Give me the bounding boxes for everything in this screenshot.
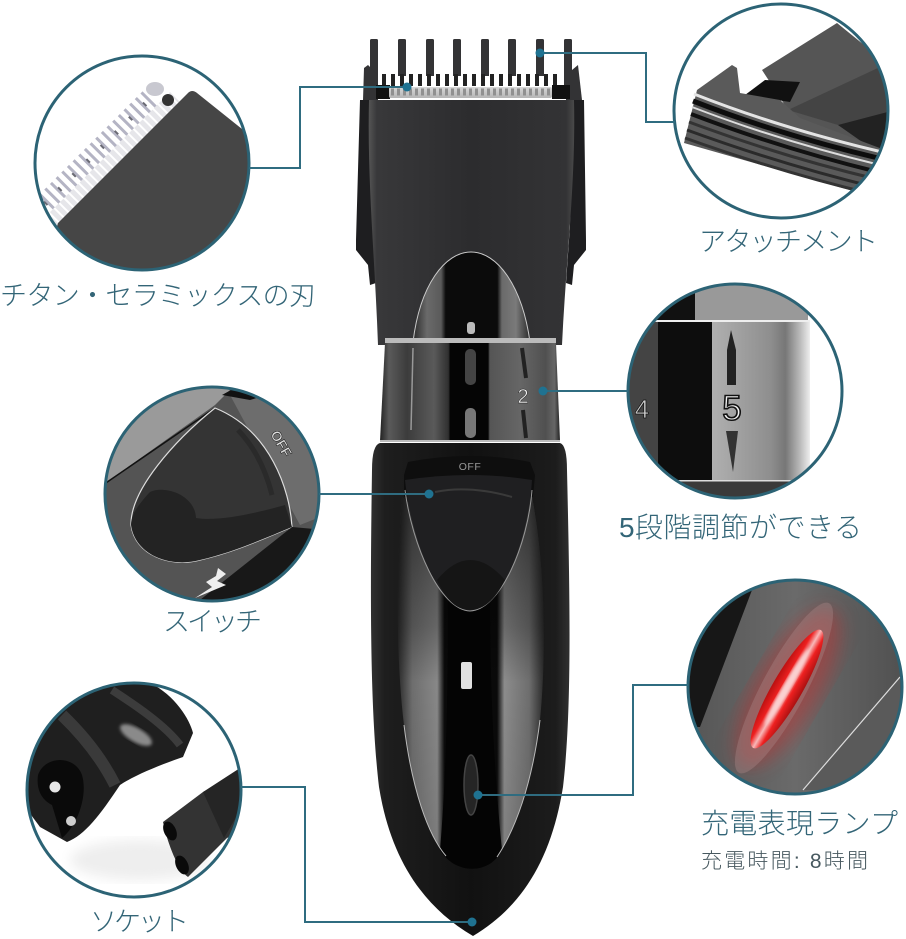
attachment comb teeth (363, 39, 582, 100)
panel: socket (20, 680, 246, 904)
connector: charging lamp (474, 685, 688, 800)
label: socket: ソケット (90, 907, 189, 937)
switch OFF mark: OFF (459, 461, 481, 473)
panel: titanium ceramic blade (30, 50, 255, 280)
reflective body panel (398, 497, 544, 869)
lightning bolt mark (195, 568, 226, 598)
dial number 5: 5 (722, 389, 742, 428)
connector: switch (319, 490, 434, 498)
connector: dial (538, 386, 628, 396)
panel: five-step adjustment (625, 280, 848, 505)
head window (413, 252, 530, 342)
attachment side arms (356, 100, 586, 285)
connector: attachment (536, 48, 675, 122)
collar setting number: 2 (517, 386, 529, 408)
label: five-step adjustment: 5段階調節ができる (619, 512, 862, 543)
panel: switch (100, 382, 325, 606)
charge contact highlight (461, 662, 472, 689)
ceramic blade (376, 76, 570, 98)
switch OFF mark: OFF (267, 428, 295, 460)
label: charging lamp: 充電表現ランプ (701, 808, 898, 839)
panel: attachment (670, 0, 895, 222)
dial number 4: 4 (635, 394, 649, 424)
connector: blade (249, 82, 412, 168)
label: titanium ceramic blade: チタン・セラミックスの刃 (0, 281, 316, 311)
clipper head (369, 100, 574, 345)
label: attachment: アタッチメント (699, 227, 878, 257)
connector: socket (241, 787, 476, 926)
panel: charging lamp (680, 575, 906, 799)
label: switch: スイッチ (163, 607, 262, 637)
label: charging time: 充電時間: 8時間 (701, 850, 868, 873)
adjustment collar (380, 338, 560, 442)
hair clipper product (356, 39, 586, 936)
power switch (404, 456, 535, 611)
power plug (163, 790, 236, 877)
clipper body (371, 443, 570, 936)
charging lamp (464, 755, 478, 815)
